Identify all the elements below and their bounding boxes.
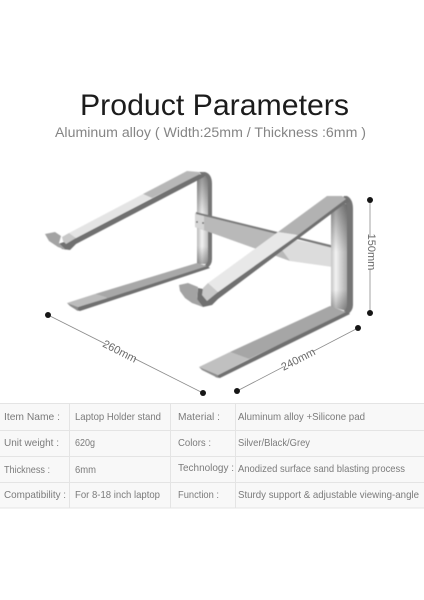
row: item name and material: Item Name : — [4, 412, 60, 423]
row: compatibility and function — [4, 490, 419, 501]
right stand foot — [199, 306, 350, 378]
row: unit weight and colors: 620g — [75, 438, 95, 449]
row: unit weight and colors: Silver/Black/Grey — [238, 438, 311, 449]
parameters table — [0, 403, 424, 508]
row: thickness and technology: Technology : — [178, 463, 234, 474]
right stand upright — [331, 196, 353, 315]
row: item name and material — [4, 412, 365, 423]
right stand hook — [179, 283, 218, 307]
right stand — [179, 196, 353, 378]
dimension: 260mm — [45, 312, 206, 396]
row: thickness and technology: Anodized surface sand blasting process — [238, 464, 405, 475]
dimension: 240mm — [234, 325, 361, 394]
row: item name and material: Material : — [178, 412, 220, 423]
row: unit weight and colors — [4, 438, 311, 449]
illustration: laptop stand — [45, 171, 353, 378]
row: unit weight and colors: Unit weight : — [4, 438, 59, 449]
left stand — [45, 171, 212, 311]
left stand hook — [45, 232, 76, 250]
left stand foot — [67, 263, 210, 311]
row: thickness and technology: Thickness : — [4, 465, 50, 476]
left stand upright — [197, 172, 212, 268]
right stand arm — [197, 196, 350, 307]
title: Product Parameters — [80, 89, 349, 122]
dimension: 260mm: 260mm — [100, 338, 139, 366]
row: thickness and technology: 6mm — [75, 465, 96, 476]
row: compatibility and function: For 8-18 inch laptop — [75, 490, 160, 501]
crossbar — [195, 212, 347, 269]
dimension: 150mm — [365, 197, 377, 316]
dimension: 240mm: 240mm — [279, 346, 318, 374]
row: compatibility and function: Compatibility : — [4, 490, 66, 501]
table background — [0, 403, 424, 508]
row: thickness and technology — [4, 463, 405, 476]
row: unit weight and colors: Colors : — [178, 438, 211, 449]
dimension: 150mm: 150mm — [365, 234, 377, 270]
row: item name and material: Laptop Holder stand — [75, 412, 161, 423]
row: compatibility and function: Function : — [178, 490, 219, 501]
subtitle: Aluminum alloy ( Width:25mm / Thickness :6mm ) — [55, 125, 366, 140]
row: item name and material: Aluminum alloy +Silicone pad — [238, 412, 365, 423]
left stand arm — [58, 171, 205, 250]
